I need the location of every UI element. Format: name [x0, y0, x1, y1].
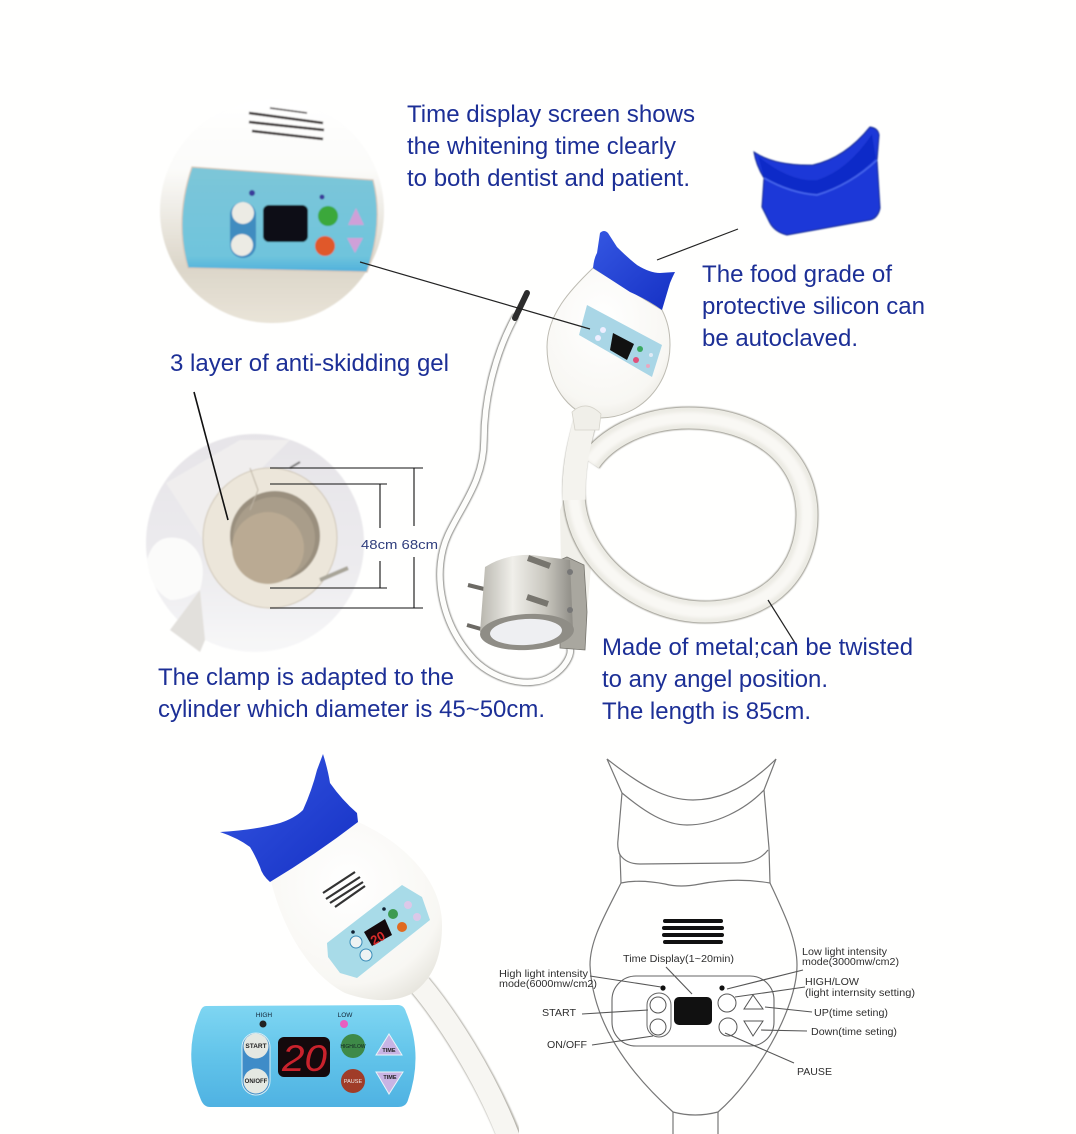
- diagram labels: Low light intensity: [802, 947, 887, 958]
- text: time display screen: the whitening time clearly: [407, 133, 676, 160]
- diagram labels: Down(time seting): [811, 1027, 897, 1038]
- photo: control panel close-up: [160, 99, 384, 323]
- text: silicone: be autoclaved.: [702, 325, 858, 352]
- gooseneck loop: [574, 412, 807, 612]
- diagram labels: HIGH/LOW: [805, 977, 860, 988]
- head vents: [323, 872, 365, 907]
- time up and down buttons: [376, 1034, 403, 1094]
- lamp head: [547, 268, 670, 418]
- line diagram of lamp: [499, 759, 915, 1134]
- text: time display screen: Time display screen shows: [407, 101, 695, 128]
- high low and pause buttons: HIGH/LOW: [340, 1044, 366, 1050]
- leader line: gel: [194, 392, 228, 520]
- clamp: [467, 555, 587, 652]
- panel labels: LOW: [338, 1012, 353, 1019]
- enlarged control panel: [191, 1005, 416, 1107]
- panel labels: HIGH: [256, 1012, 272, 1019]
- diagram labels: ON/OFF: [547, 1040, 587, 1051]
- neck: [572, 406, 601, 430]
- diagram labels: UP(time seting): [814, 1008, 888, 1019]
- head cap: [220, 754, 358, 882]
- diagram labels: mode(6000mw/cm2): [499, 979, 597, 990]
- diagram vents: [664, 921, 722, 942]
- diagram cap outline: [607, 759, 776, 886]
- head body: [271, 822, 442, 1000]
- panel labels: [256, 1012, 353, 1019]
- text: silicone: [702, 261, 925, 352]
- dimension lines: [270, 468, 423, 608]
- close-up blue panel: [182, 167, 377, 272]
- head control panel: [327, 885, 430, 978]
- diagram labels: PAUSE: [797, 1067, 832, 1078]
- start and on/off buttons: START: [245, 1043, 267, 1050]
- leader line: metal arm: [768, 600, 795, 643]
- arm tube: [420, 985, 510, 1134]
- diagram labels: (light internsity setting): [805, 988, 915, 999]
- start and on/off buttons: ON/OFF: [245, 1079, 268, 1085]
- power cable: [440, 293, 570, 682]
- text: clamp: cylinder which diameter is 45~50cm.: [158, 696, 545, 723]
- text: clamp: The clamp is adapted to the: [158, 664, 454, 691]
- high low and pause buttons: PAUSE: [344, 1079, 362, 1085]
- photo: clamp interior: [146, 434, 364, 652]
- arm support: [560, 500, 592, 625]
- text: metal arm: [602, 634, 913, 725]
- text: clamp: [158, 664, 545, 723]
- photo: lamp head front: [220, 754, 510, 1134]
- head control panel: 20: [368, 928, 388, 948]
- photo: loose silicone cup: [754, 127, 880, 235]
- dimension labels: 48cm 68cm: [361, 537, 438, 552]
- close-up buttons: [230, 190, 364, 258]
- time up and down buttons: TIME: [383, 1075, 397, 1081]
- time up and down buttons: TIME: [382, 1048, 396, 1054]
- text: time display screen: [407, 101, 695, 192]
- text: metal arm: to any angel position.: [602, 666, 828, 693]
- photo: whitening lamp with arm and clamp: [440, 231, 807, 682]
- lamp head control panel: [579, 305, 662, 377]
- text: metal arm: The length is 85cm.: [602, 698, 811, 725]
- text: silicone: protective silicon can: [702, 293, 925, 320]
- icon: vent slots: [249, 108, 324, 139]
- diagram labels: Time Display(1~20min): [623, 954, 734, 965]
- leader line: display: [360, 262, 590, 329]
- lamp head cap: [593, 231, 675, 310]
- diagram labels: START: [542, 1008, 576, 1019]
- LED time display: 20: [281, 1038, 327, 1079]
- text: time display screen: to both dentist and patient.: [407, 165, 690, 192]
- text: metal arm: Made of metal;can be twisted: [602, 634, 913, 661]
- high low and pause buttons: [340, 1034, 366, 1093]
- indicator lights: [260, 1020, 348, 1028]
- text: silicone: The food grade of: [702, 261, 892, 288]
- diagram leader lines: [582, 967, 812, 1063]
- diagram labels: [499, 947, 915, 1078]
- diagram body outline: [590, 883, 797, 1134]
- heading: anti-skidding gel: 3 layer of anti-skidding gel: [170, 350, 449, 377]
- diagram panel: [612, 976, 774, 1046]
- diagram labels: mode(3000mw/cm2): [802, 957, 899, 968]
- start and on/off buttons: [242, 1033, 270, 1095]
- leader line: silicone: [657, 229, 738, 260]
- diagram labels: High light intensity: [499, 969, 588, 980]
